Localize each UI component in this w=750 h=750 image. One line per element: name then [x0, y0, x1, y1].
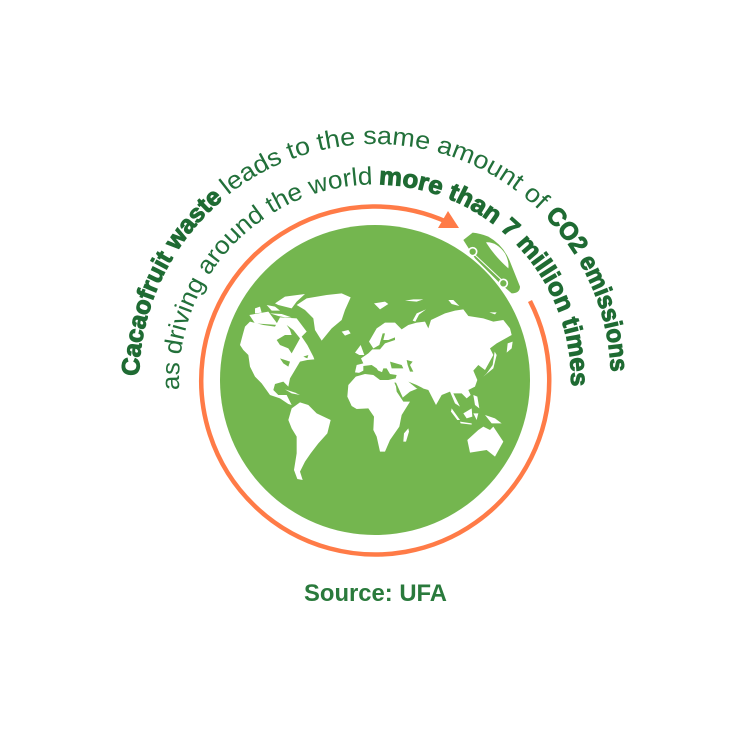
second line bold: more than 7 million times: more than 7 million times — [380, 170, 585, 386]
second line regular: as driving around the world: as driving around the world — [164, 166, 372, 389]
headline bold: Cacaofruit waste: Cacaofruit waste — [122, 191, 222, 376]
Iceland — [342, 330, 351, 336]
Novaya Zemlya — [413, 309, 426, 322]
Svalbard — [374, 302, 388, 309]
Caspian — [407, 360, 413, 372]
Madagascar — [403, 428, 409, 442]
Eurasia — [355, 309, 512, 407]
globe — [220, 225, 530, 535]
Sumatra — [451, 408, 460, 420]
Cuba — [285, 389, 300, 395]
source: Source: UFA — [304, 580, 447, 607]
Borneo — [463, 408, 472, 418]
North America — [240, 317, 314, 405]
Red Sea — [394, 383, 403, 398]
Greenland — [297, 293, 351, 341]
New Guinea — [485, 415, 502, 423]
South America — [288, 402, 331, 480]
Australia — [467, 427, 503, 457]
Philippines — [473, 395, 479, 408]
globe disc — [220, 225, 530, 535]
Great Lakes — [280, 358, 290, 367]
Black Sea — [390, 362, 403, 368]
headline bold: CO2 emissions: CO2 emissions — [548, 208, 624, 372]
Mediterranean — [355, 365, 397, 380]
UK — [355, 345, 364, 355]
Gulf of Bothnia — [372, 333, 395, 349]
Java — [460, 422, 472, 425]
orange orbit arrow — [201, 207, 549, 555]
Japan — [483, 352, 497, 377]
Arctic islands — [275, 294, 305, 308]
world map — [240, 293, 513, 480]
Hudson Bay — [277, 325, 300, 353]
curved headline — [122, 130, 624, 389]
Persian Gulf — [408, 382, 423, 388]
Kamchatka — [507, 342, 513, 353]
seas and lakes — [277, 325, 423, 398]
icon: car — [463, 233, 520, 293]
headline regular: leads to the same amount of: leads to the same amount of — [218, 130, 552, 208]
Africa — [347, 372, 410, 452]
